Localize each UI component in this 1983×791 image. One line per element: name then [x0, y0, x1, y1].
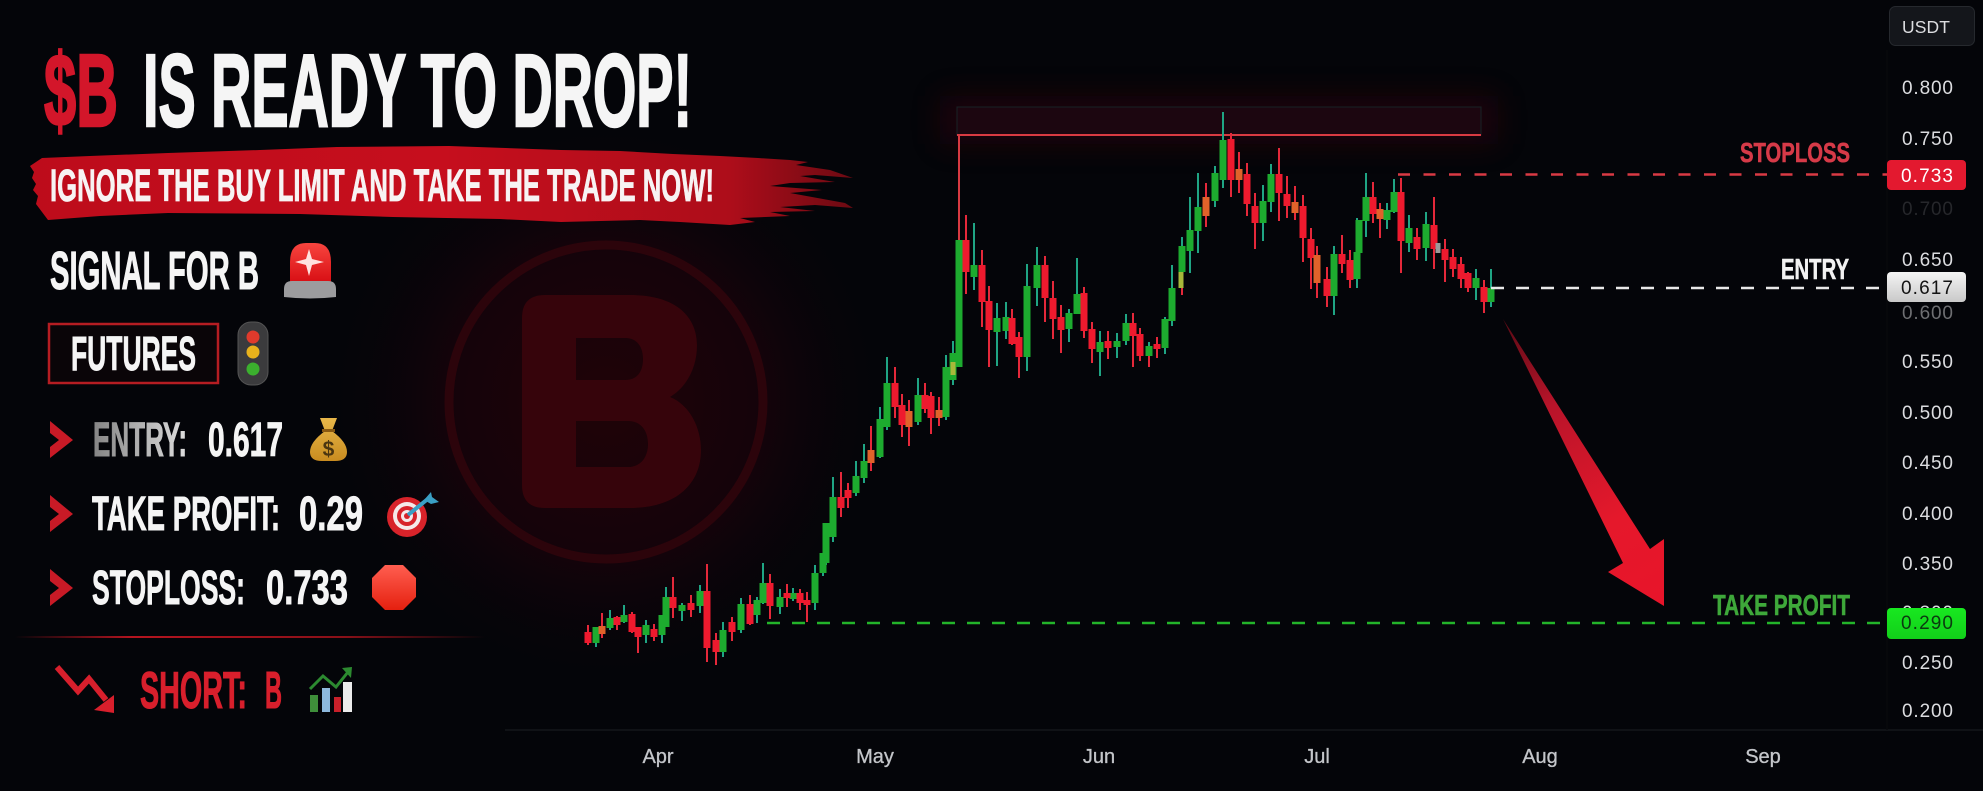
- price axis labels: 0.300: [1902, 603, 1953, 624]
- price axis labels: 0.700: [1902, 199, 1953, 220]
- orange bodies: [602, 169, 1380, 634]
- price tag: entry: 0.617: [1901, 278, 1953, 299]
- row: take profit: 0.29: [299, 488, 363, 541]
- stoploss dashed line: [1398, 173, 1887, 176]
- price axis labels: 0.800: [1902, 78, 1953, 99]
- green bodies: [596, 140, 1491, 652]
- time axis labels: Apr: [642, 746, 674, 768]
- price tag: stoploss: [1887, 160, 1966, 190]
- icon: money bag: [310, 418, 347, 461]
- background glow behind logo: [316, 112, 896, 692]
- price axis labels: 0.400: [1902, 504, 1953, 525]
- short signal: B: [265, 662, 282, 720]
- short signal: [57, 662, 352, 720]
- row: take profit: TAKE PROFIT:: [92, 488, 280, 541]
- candlestick chart: [588, 112, 1491, 665]
- label: take profit: TAKE PROFIT: [1713, 590, 1850, 622]
- title: [44, 33, 692, 148]
- brush banner: IGNORE THE BUY LIMIT AND TAKE THE TRADE NOW!: [50, 160, 714, 211]
- price axis labels: 0.550: [1902, 352, 1953, 373]
- icon: traffic light: [238, 322, 268, 385]
- price axis labels: 0.650: [1902, 250, 1953, 271]
- grey doji: [1436, 243, 1440, 253]
- icon: falling zigzag arrow: [57, 667, 114, 713]
- futures badge: FUTURES: [71, 328, 196, 381]
- yellow body: [953, 272, 1181, 375]
- currency badge USDT: [1890, 6, 1974, 46]
- price axis labels: 0.250: [1902, 653, 1953, 674]
- row: entry: ENTRY:: [93, 414, 187, 467]
- icon: dart target: [387, 492, 439, 537]
- time axis labels: Sep: [1745, 746, 1781, 768]
- price axis labels: 0.600: [1902, 303, 1953, 324]
- label: stoploss: STOPLOSS: [1740, 137, 1850, 168]
- time axis labels: Jun: [1083, 746, 1115, 768]
- icon: chart: [310, 667, 352, 712]
- green wicks: [596, 112, 1491, 657]
- icon: siren: [284, 243, 336, 298]
- time axis labels: May: [856, 746, 894, 768]
- label: entry: ENTRY: [1781, 254, 1849, 286]
- red wicks: [588, 133, 1484, 665]
- watermark logo B: [449, 245, 763, 559]
- icon: stop sign: [372, 565, 416, 610]
- price tag: stoploss: 0.733: [1901, 166, 1953, 187]
- title: $B: [44, 33, 118, 148]
- resistance zone: [940, 96, 1498, 240]
- row: stoploss: 0.733: [266, 562, 348, 615]
- red bodies: [588, 139, 1484, 652]
- take profit dashed line: [767, 622, 1887, 624]
- row: stoploss: STOPLOSS:: [92, 562, 245, 615]
- icon: money bag: $: [323, 438, 335, 461]
- price axis labels: 0.500: [1902, 403, 1953, 424]
- signal heading: SIGNAL FOR B: [50, 241, 259, 301]
- entry dashed line: [1491, 287, 1887, 289]
- price axis labels: 0.200: [1902, 701, 1953, 722]
- time axis labels: Jul: [1304, 746, 1330, 768]
- price axis labels: 0.350: [1902, 554, 1953, 575]
- price axis labels: 0.450: [1902, 453, 1953, 474]
- price tag: take profit: [1887, 608, 1966, 639]
- big red down arrow: [1503, 319, 1664, 606]
- short signal: SHORT:: [140, 662, 247, 720]
- time axis labels: [642, 746, 1781, 768]
- futures badge: [49, 324, 218, 383]
- time axis labels: Aug: [1522, 746, 1558, 768]
- brush banner: [30, 146, 853, 225]
- chart axes frame: [505, 50, 1983, 730]
- price axis labels: 0.750: [1902, 129, 1953, 150]
- title: IS READY TO DROP!: [143, 33, 692, 148]
- price tag: entry: [1887, 272, 1966, 302]
- currency badge USDT: USDT: [1902, 17, 1950, 37]
- price axis labels: [1902, 78, 1953, 722]
- price tag: take profit: 0.290: [1901, 613, 1953, 634]
- row: entry: 0.617: [208, 414, 283, 467]
- row: entry: [50, 414, 347, 467]
